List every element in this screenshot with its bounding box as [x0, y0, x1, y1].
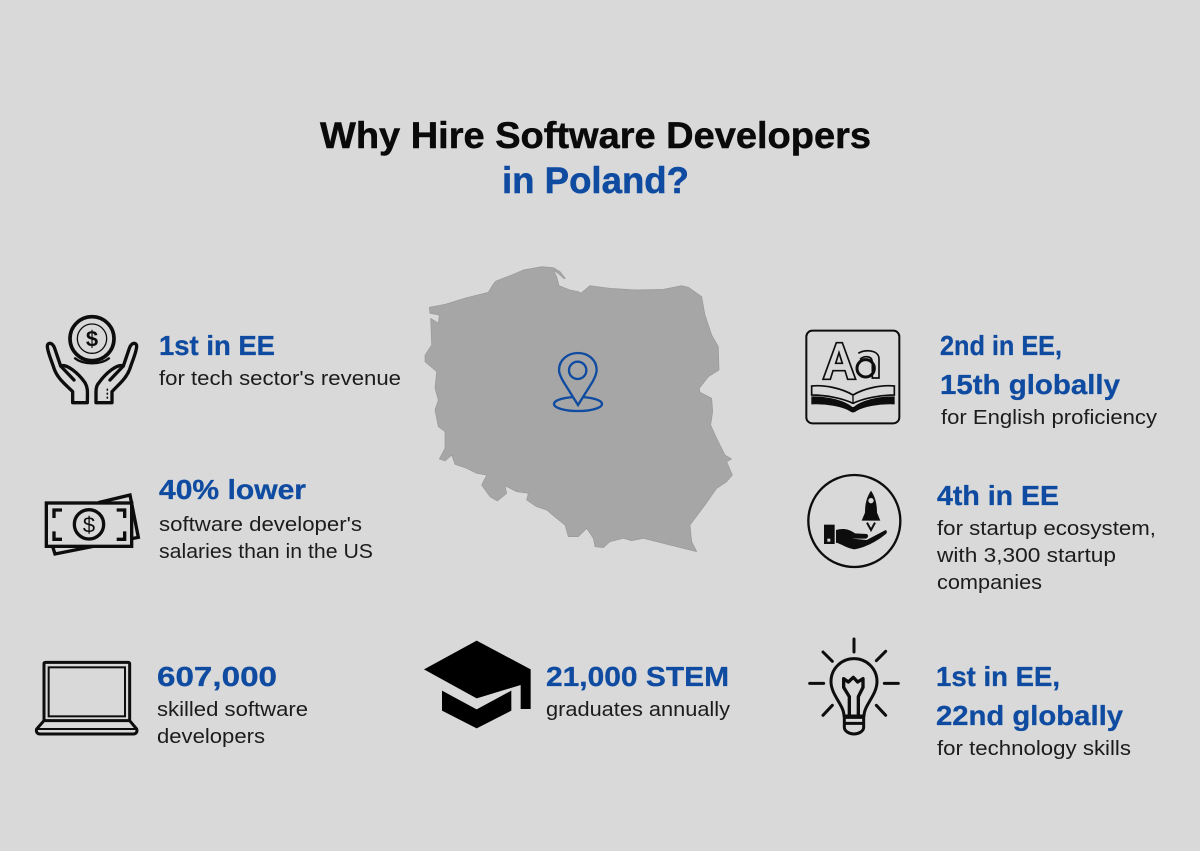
map of Poland	[425, 267, 732, 552]
item: English proficiency: 2nd in EE,	[940, 330, 1062, 361]
item: startup ecosystem	[808, 475, 1156, 594]
item: startup ecosystem: for startup ecosystem,	[937, 518, 1156, 540]
icon: hands holding coin: $	[86, 327, 98, 352]
item: 40% lower salaries: 40% lower	[159, 474, 306, 505]
item: technology skills	[810, 639, 1131, 760]
item: 607,000 developers: 607,000	[157, 661, 277, 692]
title: Why Hire Software Developers	[320, 115, 871, 156]
item: startup ecosystem: with 3,300 startup	[936, 545, 1116, 567]
item: 607,000 developers	[36, 661, 308, 748]
item: 607,000 developers: skilled software	[157, 699, 308, 721]
item: 1st in EE tech revenue: 1st in EE	[159, 330, 275, 361]
item: startup ecosystem: 4th in EE	[937, 480, 1059, 511]
item: technology skills: for technology skills	[937, 738, 1131, 760]
item: 21,000 STEM graduates: 21,000 STEM	[546, 661, 729, 692]
item: 21,000 STEM graduates	[424, 641, 730, 728]
icon: hands holding coin	[47, 317, 137, 403]
item: 40% lower salaries: software developer's	[159, 514, 362, 536]
item: startup ecosystem: companies	[937, 572, 1042, 594]
item: 40% lower salaries: salaries than in the US	[159, 541, 373, 563]
icon: book with letters	[806, 331, 899, 423]
item: 21,000 STEM graduates: graduates annually	[546, 699, 730, 721]
title	[320, 115, 871, 201]
item: 1st in EE tech revenue	[47, 317, 401, 403]
icon: banknotes	[46, 495, 138, 554]
item: English proficiency: 15th globally	[940, 369, 1120, 400]
item: 40% lower salaries	[46, 474, 373, 563]
item: English proficiency: for English proficiency	[941, 407, 1157, 429]
icon: hand with rocket	[808, 475, 900, 567]
icon: banknotes: $	[83, 512, 95, 537]
item: 607,000 developers: developers	[157, 726, 265, 748]
icon: laptop	[36, 662, 137, 734]
item: technology skills: 1st in EE,	[936, 661, 1060, 692]
item: technology skills: 22nd globally	[936, 700, 1123, 731]
item: English proficiency	[806, 330, 1157, 429]
title: in Poland?	[502, 160, 689, 201]
icon: light bulb	[810, 639, 898, 734]
icon: location pin	[554, 353, 602, 411]
icon: graduation cap	[424, 641, 531, 728]
item: 1st in EE tech revenue: for tech sector's revenue	[159, 368, 401, 390]
